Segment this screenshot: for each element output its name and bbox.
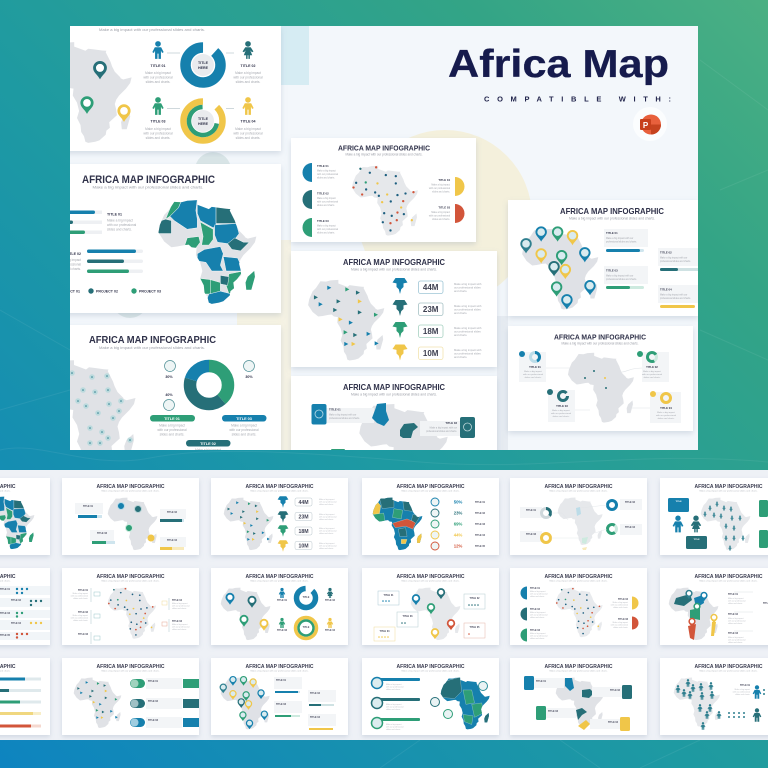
pushpins [392,278,408,360]
heading: AFRICA MAP INFOGRAPHIC [89,334,216,346]
pills and captions: Make a big impact [195,448,221,452]
thumbnail row 3 column 3: pins and bars: TITLE 02 [310,692,321,695]
pills and captions: Make a big impact [231,424,257,428]
donut item 02: TITLE 02 [646,365,658,369]
heading: AFRICA MAP INFOGRAPHIC [338,144,431,152]
blue person with title 01: with our professional [143,76,173,80]
thumbnail row 2 column 4: pins with rating boxes: TITLE 02 [470,597,480,600]
legend [58,288,161,294]
donut item 04: TITLE 04 [660,406,672,410]
descriptions: our professional slides [454,330,481,334]
thumbnail row 2 column 2: dots with vertical lines: TITLE 01 [78,589,89,592]
shadows of large cards [60,26,497,460]
map pins [80,61,131,122]
text: title 02: Make a big impact [55,258,81,262]
left half circle items: TITLE 03 [317,219,329,223]
thumbnail row 2 column 1: dot rating table: TITLE 01 [0,588,11,591]
thumbnail row 2 column 4: pins with rating boxes: TITLE 03 [403,615,413,618]
descriptions: and charts. [454,333,468,337]
yellow person with title 04: Make a big impact [235,127,261,131]
subtitle: Make a big impact with our professional slides and charts. [99,28,205,32]
thumbnail row 1 column 2: bars with circles [75,484,186,550]
icon: PowerPoint: P [643,121,649,130]
thumbnail row 1 column 2: bars with circles: TITLE 01 [83,505,94,508]
thumbnail row 1 column 5: donuts around map: TITLE 04 [625,526,636,529]
thumbnail row 1 column 3: pushpin values: 23M [298,514,309,520]
thumbnail row 2 column 4: pins with rating boxes: TITLE 05 [470,626,480,629]
left half circle items: Make a big impact [317,170,336,172]
info 01: professional slides and charts. [329,417,360,420]
thumbnail row 1 column 4: multicolor map percentages: 69% [454,522,462,526]
yellow and green donut with title here: TITLE [198,117,209,121]
decorative light blue block [281,26,309,85]
text panels [604,229,698,303]
left half circle items: with our professional [317,173,339,176]
thumbnail row 2 column 3: pins, people, donuts: TITLE 03 [277,629,288,632]
right half circle items: TITLE 04 [438,178,450,182]
pills and captions: TITLE 01 [164,417,180,421]
panel text: Make a big impact with our [606,237,634,240]
descriptions: Make a big impact with [454,282,482,286]
thumbnail row 1 column 4: multicolor map percentages: 50% [454,500,462,504]
thumbnail row 2 column 4: pins with rating boxes: TITLE 01 [384,594,394,597]
thumbnail row 3 column 3: pins and bars [220,664,336,730]
stat icons and percentages: 30% [165,375,173,379]
panel text: professional slides and charts. [660,297,691,300]
connector lines [167,53,234,108]
info 02: professional slides and charts. [426,430,457,433]
values: 44M [423,283,439,292]
info 02: Make a big impact with our [430,426,457,430]
yellow and green donut with title here [180,98,226,144]
blue person with title 01 [143,41,173,84]
card D: dot map with half circles [291,138,476,242]
values: 18M [423,327,439,336]
donut item 04: Make a big impact [657,411,675,414]
decorative shapes behind cards [112,152,508,450]
thumbnail row 3 column 2: toggles and blocks [74,664,199,728]
lower thumbnail strip background [0,470,768,740]
thumbnail row 2 column 6: country pins: TITLE 03 [728,632,739,635]
pills and captions: slides and charts. [160,432,185,436]
left half circle items: TITLE 01 [317,164,329,168]
donut item 02: Make a big impact [643,370,661,373]
thumbnail row 1 column 4: multicolor map percentages: TITLE 02 [475,512,486,515]
right half circle items: with our professional [429,187,450,190]
thumbnail row 2 column 1: dot rating table: TITLE 03 [0,612,11,615]
pills and captions: with our professional [157,428,187,432]
thumbnail row 3 column 1: long bars [0,664,41,728]
subtitle: Make a big impact with our professional slides and charts. [562,342,639,346]
gray map [359,404,448,450]
thumbnail row 1 column 4: multicolor map percentages: TITLE 01 [475,501,486,504]
descriptions: our professional slides [454,352,481,356]
subtitle: compatible with: COMPATIBLE WITH: [484,94,671,104]
thumbnail row 2 column 2: dots with vertical lines: TITLE 03 [78,633,89,636]
bars group 1 [70,210,102,234]
Africa map with pins [520,226,598,310]
card G: pins and progress bars [508,200,698,316]
panel text: TITLE 04 [660,288,672,292]
donut item 04: with our professional [656,414,677,417]
left half circle items: with our professional [317,228,339,231]
text: title 01 [107,212,137,232]
value boxes [418,281,443,360]
bars group 2 [87,250,143,273]
donut item 04 [650,391,681,423]
thumbnail row 3 column 3: pins and bars: TITLE 01 [276,679,287,682]
thumbnail row 2 column 5: dot map with half circles: TITLE 04 [618,598,629,601]
card H: donuts around map [508,326,693,431]
thumbnail row 3 column 5: highlighted countries: TITLE 04 [608,721,619,724]
gray map with dots [568,353,634,423]
blue donut with title here: HERE [198,66,209,70]
thumbnail row 2 column 5: dot map with half circles: TITLE 02 [530,608,541,611]
pills and captions: TITLE 02 [200,442,216,446]
thumbnail row 1 column 4: multicolor map percentages: 12% [454,544,462,548]
thumbnail row 1 column 1: colored map [0,484,35,550]
thumbnail row 2 column 5: dot map with half circles [520,574,638,642]
thumbnail row 1 column 6: people map: TITLE [693,539,700,541]
card E: population pins [291,251,497,367]
blue person with title 01: slides and charts. [146,80,171,84]
thumbnail row 1 column 4: multicolor map percentages: TITLE 04 [475,534,486,537]
heading: AFRICA MAP INFOGRAPHIC [554,332,647,342]
descriptions: Make a big impact with [454,304,482,308]
thumbnail row 2 column 2: dots with vertical lines: TITLE 04 [172,599,183,602]
dark country shape [400,423,418,438]
yellow person with title 04: with our professional [233,132,263,136]
text: title 02: slides and charts. [56,267,81,271]
decorative beige circle [362,130,530,286]
heading: AFRICA MAP INFOGRAPHIC [343,383,445,392]
thumbnail row 2 column 3: pins, people, donuts: TITLE 01 [277,599,288,602]
subtitle: Make a big impact with our professional slides and charts. [99,346,205,350]
panel text: Make a big impact with our [606,274,634,278]
donut item 03: TITLE 03 [556,404,568,408]
legend: PROJECT 02 [96,290,118,294]
thumbnail row 1 column 3: pushpin values: 10M [298,544,309,550]
thumbnail row 1 column 3: pushpin values [224,484,337,552]
thumbnail row 1 column 3: pushpin values: 44M [298,500,309,506]
thumbnail row 1 column 2: bars with circles: TITLE 04 [167,539,178,542]
dark person with title 02: slides and charts. [236,80,261,84]
green person with title 03: with our professional [143,132,173,136]
yellow person with title 04 [233,97,263,140]
text: title 01: slides and charts. [107,228,132,232]
pills and captions [150,415,266,452]
thumbnail row 1 column 4: multicolor map percentages: 23% [454,510,462,516]
card A: people and donuts [70,28,262,144]
connector lines [546,368,650,410]
thumbnail row 2 column 6: country pins: TITLE 01 [728,593,739,596]
right half circle items: slides and charts. [432,218,450,221]
dark person with title 02: Make a big impact [235,71,261,75]
card C: donut and icons [70,336,266,450]
thumbnail row 2 column 1: dot rating table: TITLE 05 [0,634,11,637]
subtitle: Make a big impact with our professional slides and charts. [569,216,655,220]
donut item 02: with our professional [642,373,663,376]
thumbnail row 1 column 3: pushpin values: 18M [298,529,309,535]
thumbnail row 2 column 3: pins, people, donuts: TITLE 04 [325,629,336,632]
left half circle items: Make a big impact [317,224,336,228]
donut item 02 [637,351,669,382]
thumbnail row 3 column 6: people map with dots: TITLE 01 [740,684,751,687]
donut item 01: TITLE 01 [529,365,541,369]
thumbnail row 2 column 3: pins, people, donuts: TITLE 02 [325,599,336,602]
thumbnail row 1 column 6: people map [668,484,768,551]
panel text: professional slides and charts. [606,240,637,244]
text: title 02: with our professional [52,262,81,266]
thumbnail row 1 column 5: donuts around map: TITLE 01 [526,509,537,512]
left half circle items: TITLE 02 [317,192,329,196]
pills and captions: TITLE 03 [236,417,252,421]
thumbnail row 1 column 6: people map: TITLE [675,501,682,503]
green icon cut off [331,449,345,450]
thumbnail row 1 column 5: donuts around map [520,484,642,550]
thumbnail row 3 column 4: rings with map [372,664,490,731]
panel text [606,231,691,300]
thumbnail row 3 column 5: highlighted countries: TITLE 02 [610,689,621,692]
thumbnail row 3 column 5: highlighted countries [524,664,632,731]
blue donut with title here: TITLE [198,61,209,65]
info 02 [420,417,475,438]
donut item 03 [547,389,575,422]
blue person with title 01: TITLE 01 [151,64,165,68]
thumbnail row 2 column 5: dot map with half circles: TITLE 01 [530,587,541,590]
donut item 04: slides and charts. [657,417,675,420]
left half circle items: slides and charts. [317,176,335,180]
text: title 02 [70,252,81,270]
thumbnail row 2 column 2: dots with vertical lines: TITLE 03 [172,620,183,623]
legend: PROJECT 01 [58,290,80,294]
icon: PowerPoint [633,107,667,141]
panel text: TITLE 01 [606,231,618,235]
heading: AFRICA MAP INFOGRAPHIC [82,174,215,186]
thumbnail row 3 column 5: highlighted countries: TITLE 03 [548,710,559,713]
heading: AFRICA MAP INFOGRAPHIC [560,207,664,216]
donut item 03: with our professional [551,412,572,415]
green person with title 03: Make a big impact [145,127,171,131]
card B: colored map with bars [70,176,256,304]
descriptions: Make a big impact with [454,348,482,352]
stat icons and percentages: 30% [245,375,253,379]
yellow person with title 04: slides and charts. [236,136,261,140]
dark person with title 02: TITLE 02 [241,64,255,68]
right half circle items: slides and charts. [432,190,450,194]
thumbnail row 2 column 3: pins, people, donuts: TITLE [303,626,310,629]
descriptions: and charts. [454,311,468,315]
yellow and green donut with title here: HERE [198,122,209,126]
left half circle items: slides and charts. [317,204,335,207]
panel text: Make a big impact with our [660,294,688,296]
thumbnail row 1 column 4: multicolor map percentages: 44% [454,532,462,538]
descriptions: Make a big impact with [454,326,482,330]
heading: AFRICA MAP INFOGRAPHIC [343,258,445,267]
donut item 01: slides and charts. [524,376,542,379]
info 02: TITLE 02 [445,421,457,425]
thumbnail card shadows [0,478,768,735]
info 01 [312,404,374,424]
right half circle items: Make a big impact [431,211,450,214]
gray Africa map [70,42,132,143]
card F: highlighted countries [312,384,475,450]
pills and captions: Make a big impact [159,424,185,428]
yellow person with title 04: TITLE 04 [241,120,255,124]
right half circle items: with our professional [429,214,450,218]
Africa map with markers [308,280,384,361]
subtitle: Make a big impact with our professional slides and charts. [92,186,204,190]
thumbnail row 2 column 5: dot map with half circles: TITLE 03 [530,629,541,632]
descriptions: and charts. [454,289,468,293]
descriptions: and charts. [454,355,468,359]
blue donut with title here [180,42,226,88]
blue country shape [372,403,389,426]
thumbnail row 2 column 4: pins with rating boxes [374,574,485,641]
panel text: TITLE 03 [606,268,618,272]
donut chart [190,366,228,404]
stat icons and percentages [164,360,254,410]
panel text: TITLE 02 [660,250,672,254]
info 01: Make a big impact with our [329,414,357,416]
thumbnail row 1 column 4: multicolor map percentages: TITLE 03 [475,523,486,526]
green person with title 03 [143,97,173,140]
thumbnail row 3 column 2: toggles and blocks: TITLE 02 [148,700,159,703]
left half circle items: Make a big impact [317,197,336,200]
dark person with title 02: with our professional [233,76,263,80]
green person with title 03: TITLE 03 [151,120,165,124]
text: title 01: with our professional [107,223,137,227]
values: 23M [423,305,439,314]
panel text: professional slides and charts. [606,278,637,281]
blue person with title 01: Make a big impact [145,71,171,75]
thumbnail row 2 column 5: dot map with half circles: TITLE 03 [618,618,629,621]
subtitle: Make a big impact with our professional slides and charts. [351,392,437,396]
info 01: TITLE 01 [329,408,341,412]
donut item 03: Make a big impact [552,409,570,412]
right half circle items: TITLE 03 [438,206,450,210]
values [423,283,439,358]
thumbnail row 3 column 2: toggles and blocks: TITLE 01 [148,680,159,683]
subtitle: Make a big impact with our professional slides and charts. [351,268,437,272]
text: title 01: TITLE 01 [107,212,122,216]
thumbnail row 3 column 5: highlighted countries: TITLE 01 [536,680,547,683]
legend: PROJECT 03 [139,290,161,294]
pills and captions: with our professional [229,428,259,432]
main showcase panel [70,26,698,450]
thumbnail row 1 column 5: donuts around map: TITLE 02 [625,501,636,504]
thumbnail row 2 column 6: country pins [669,574,768,644]
thumbnail row 2 column 1: dot rating table: TITLE 04 [11,622,22,625]
title: Africa Map: Africa Map [448,43,669,86]
panel text: Make a big impact with our [660,256,688,260]
thumbnail row 3 column 3: pins and bars: TITLE 03 [276,703,287,706]
panel text: professional slides and charts. [660,260,691,263]
thumbnail row 1 column 2: bars with circles: TITLE 03 [97,532,108,535]
thumbnail row 2 column 1: dot rating table: TITLE 02 [11,599,22,602]
values: 10M [423,349,439,358]
colored Africa map [157,199,258,306]
thumbnail row 3 column 3: pins and bars: TITLE 04 [310,716,321,719]
donut item 01: Make a big impact [524,370,542,373]
donut item 01 [519,351,546,382]
text: title 02: TITLE 02 [66,252,81,256]
thumbnail row 3 column 6: people map with dots [674,664,765,730]
descriptions: our professional slides [454,308,481,312]
thumbnail row 3 column 2: toggles and blocks: TITLE 03 [148,719,159,722]
donut item 03: slides and charts. [552,415,570,418]
thumbnail row 1 column 5: donuts around map: TITLE 03 [526,533,537,536]
thumbnail row 2 column 2: dots with vertical lines: TITLE 02 [78,611,89,614]
green person with title 03: slides and charts. [146,136,171,140]
thumbnail row 2 column 2: dots with vertical lines [71,574,190,644]
thumbnail row 1 column 2: bars with circles: TITLE 02 [167,511,178,514]
left half circle items [302,163,339,237]
right half circle items [429,177,464,223]
descriptions: our professional slides [454,286,481,290]
thumbnail row 1 column 4: multicolor map percentages: TITLE 05 [475,545,486,548]
thumbnail row 2 column 6: country pins: TITLE 02 [728,613,739,616]
descriptions [454,282,482,359]
progress bars [606,249,698,308]
thumbnail row 1 column 4: multicolor map percentages [372,484,486,550]
pills and captions: slides and charts. [232,432,257,436]
thumbnail row 2 column 3: pins, people, donuts: TITLE [303,596,310,599]
left half circle items: slides and charts. [317,232,335,234]
subtitle: Make a big impact with our professional slides and charts. [346,152,423,156]
text: title 01: Make a big impact [107,218,133,222]
right half circle items: Make a big impact [431,184,450,186]
donut item 02: slides and charts. [643,376,661,379]
thumbnail row 2 column 1: dot rating table [0,574,50,640]
gray map with ring markers [70,360,136,450]
donut item 01: with our professional [523,373,544,376]
dark person with title 02 [233,41,263,84]
dotted Africa map [352,166,418,236]
thumbnail row 2 column 4: pins with rating boxes: TITLE 04 [380,630,390,633]
stat icons and percentages: 40% [165,393,173,397]
left half circle items: with our professional [317,200,339,204]
thumbnail row 2 column 3: pins, people, donuts [221,574,336,640]
